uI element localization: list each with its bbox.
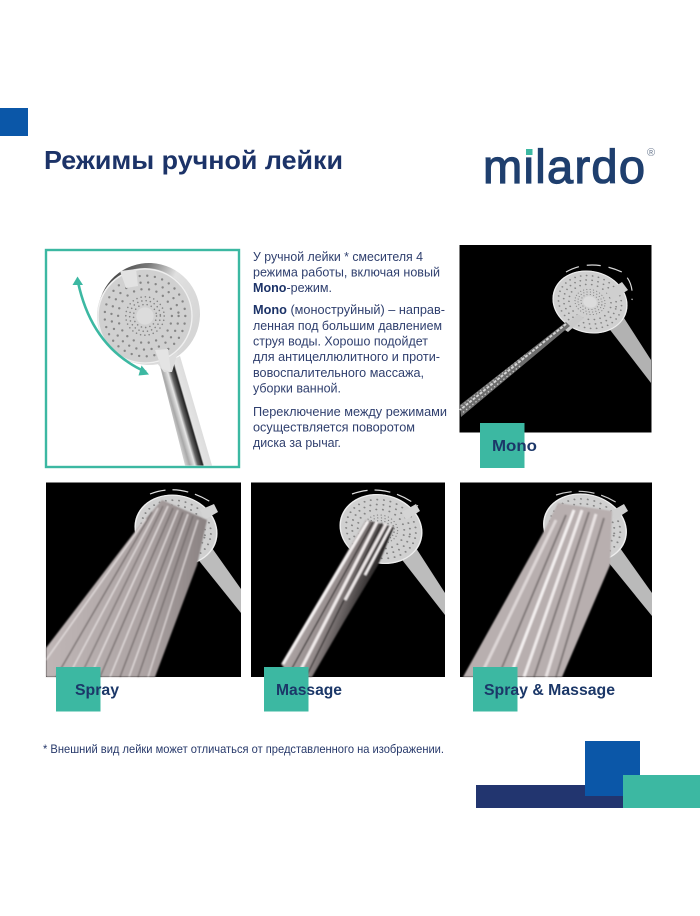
paragraph: switching: диска за рычаг. bbox=[253, 435, 341, 450]
paragraph: Mono description: струя воды. Хорошо подойдет bbox=[253, 334, 428, 348]
label: Mono bbox=[480, 423, 537, 468]
paragraph: intro: режима работы, включая новый bbox=[253, 264, 440, 280]
paragraph: Mono description: ленная под большим давлением bbox=[253, 318, 442, 333]
paragraph: Mono description: Mono (моноструйный) – направ- bbox=[253, 302, 445, 317]
icon: shower head bbox=[84, 249, 214, 379]
label: Spray bbox=[56, 667, 119, 712]
label: Mono: Mono bbox=[492, 438, 537, 455]
water streams bbox=[463, 503, 612, 677]
label: Massage: Massage bbox=[276, 682, 342, 699]
corner accent square bbox=[0, 108, 28, 136]
icon: shower handle bbox=[600, 548, 652, 616]
photo: Mono mode bbox=[460, 245, 652, 432]
water jet bbox=[460, 322, 570, 417]
decorative corner blocks bbox=[476, 741, 700, 808]
icon: shower head bbox=[126, 485, 226, 575]
icon: shower handle bbox=[396, 548, 445, 615]
icon: shower handle bbox=[192, 548, 241, 613]
icon: chrome handle bbox=[160, 356, 212, 466]
paragraph: intro bbox=[253, 249, 440, 295]
paragraph: switching: осуществляется поворотом bbox=[253, 420, 415, 434]
paragraph: Mono description: для антицеллюлитного и проти- bbox=[253, 349, 440, 364]
label: Spray & Massage bbox=[473, 667, 615, 712]
icon: shower handle bbox=[604, 318, 651, 383]
paragraph: switching: Переключение между режимами bbox=[253, 404, 447, 419]
water streams bbox=[46, 500, 207, 677]
logo: milardo: milardo bbox=[483, 140, 645, 193]
photo: Spray mode bbox=[46, 482, 241, 677]
photo: Massage mode bbox=[251, 482, 445, 677]
paragraph: intro: Mono-режим. bbox=[253, 280, 332, 295]
label: Massage bbox=[264, 667, 342, 712]
water streams bbox=[281, 520, 394, 677]
label: Spray & Massage: Spray & Massage bbox=[484, 682, 615, 699]
logo: milardo: ® bbox=[647, 147, 655, 159]
paragraph: switching bbox=[253, 404, 447, 450]
paragraph: intro: У ручной лейки * смесителя 4 bbox=[253, 249, 423, 264]
paragraph: Mono description: уборки ванной. bbox=[253, 380, 341, 396]
arrow: rotation direction bbox=[72, 276, 149, 376]
text block: description bbox=[253, 249, 447, 450]
label: Spray: Spray bbox=[75, 682, 119, 699]
icon: shower head bbox=[332, 485, 430, 573]
paragraph: Mono description: вовоспалительного массажа, bbox=[253, 365, 424, 380]
panel: shower head with rotation arrow bbox=[46, 249, 239, 467]
photo: Spray and Massage mode bbox=[460, 482, 652, 677]
paragraph: Mono description bbox=[253, 302, 445, 396]
title: Режимы ручной лейки bbox=[44, 145, 343, 175]
icon: shower head bbox=[545, 262, 635, 342]
footnote: * Внешний вид лейки может отличаться от представленного на изображении. bbox=[43, 742, 444, 756]
icon: shower head bbox=[535, 484, 635, 572]
